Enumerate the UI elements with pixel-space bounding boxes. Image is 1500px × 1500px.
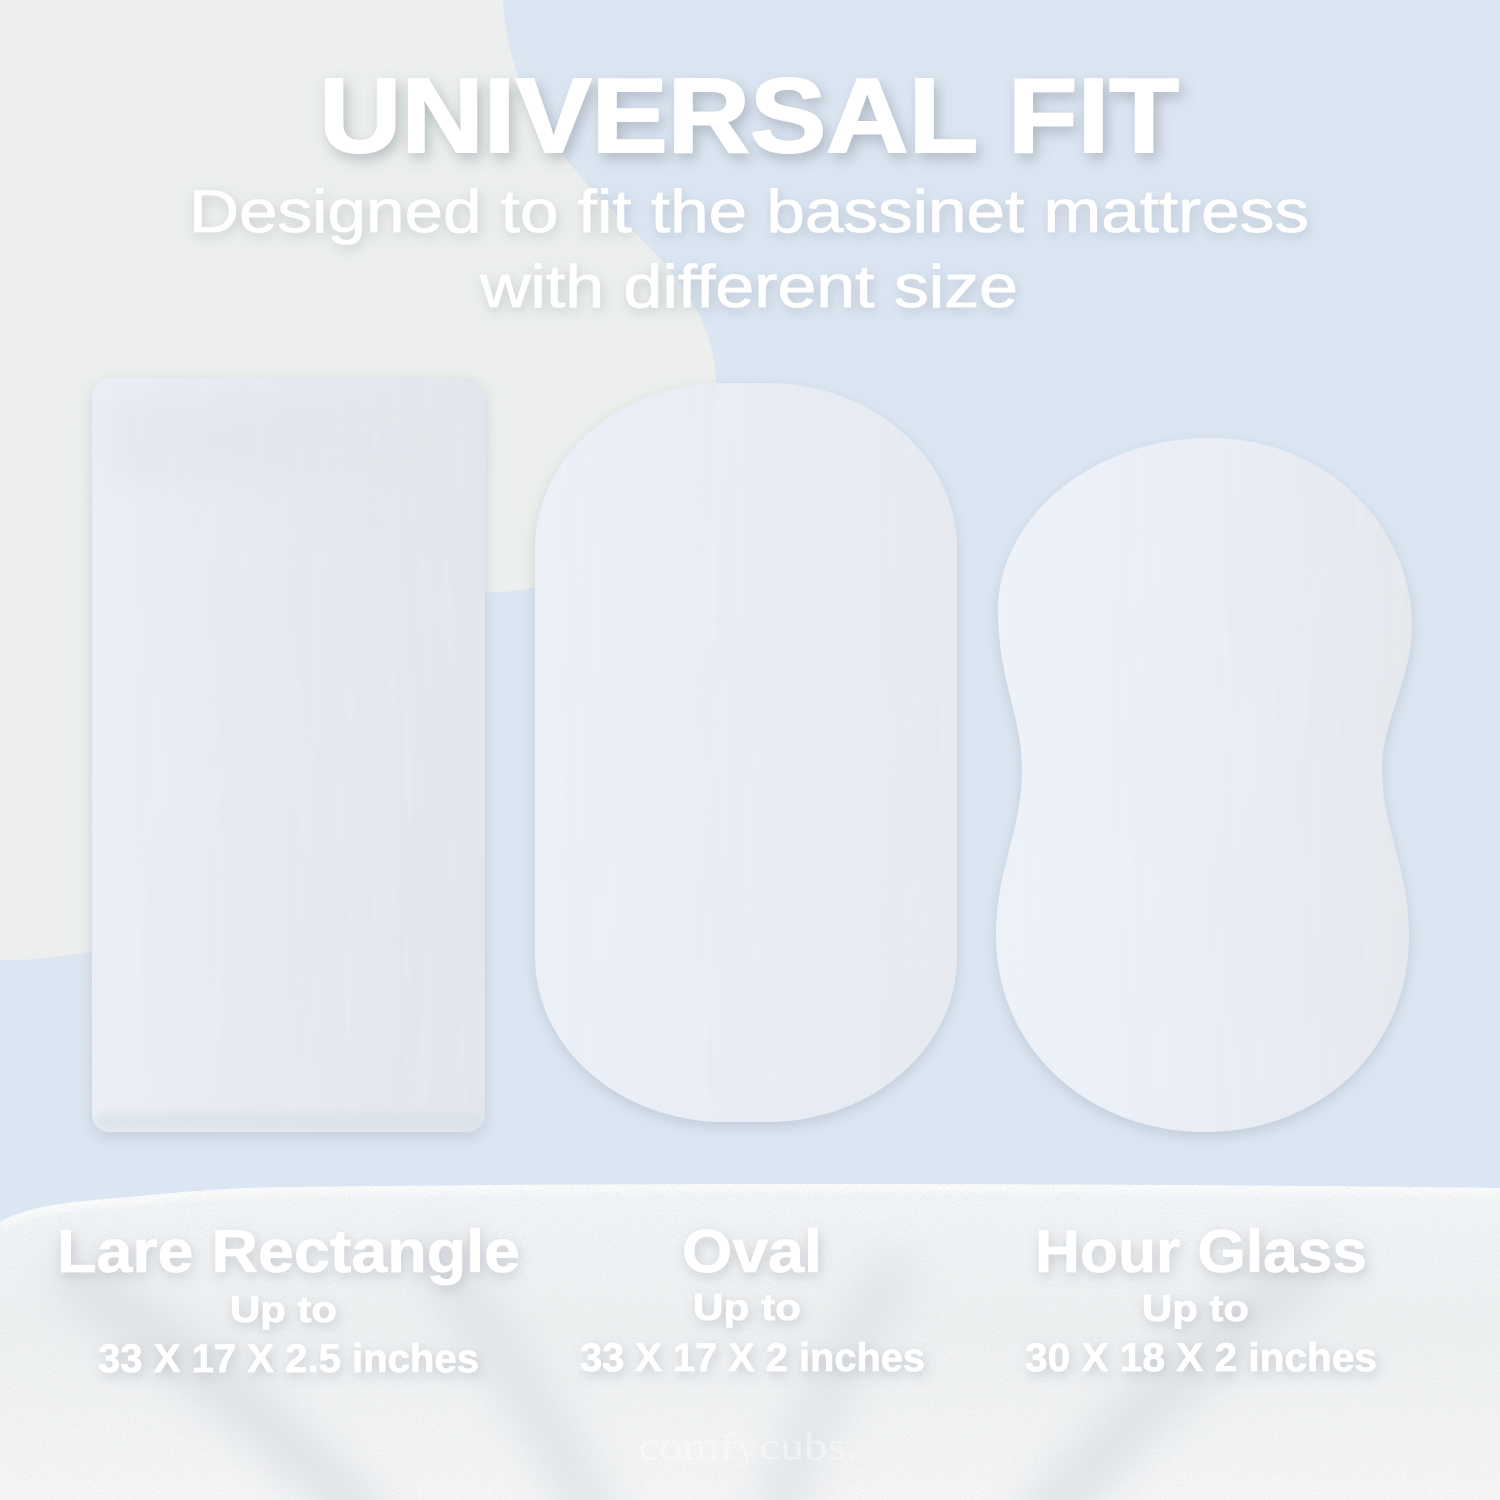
label: large rectangle: Lare Rectangle — [57, 1218, 520, 1285]
fabric strip — [0, 1180, 1500, 1500]
label: oval: Up to — [693, 1287, 801, 1328]
label: hourglass: Up to — [1142, 1288, 1249, 1329]
label: large rectangle — [57, 1218, 520, 1381]
brand logo: comfycubs. — [638, 1426, 858, 1468]
label: large rectangle: 33 X 17 X 2.5 inches — [98, 1337, 479, 1381]
label: oval — [580, 1218, 925, 1380]
label: large rectangle: Up to — [230, 1289, 337, 1330]
label: hourglass: 30 X 18 X 2 inches — [1025, 1336, 1377, 1380]
subtitle: with different size — [479, 253, 1018, 320]
label: hourglass: Hour Glass — [1035, 1218, 1367, 1285]
subtitle — [189, 178, 1309, 320]
label: oval: 33 X 17 X 2 inches — [580, 1336, 925, 1380]
background shape: grey blob — [0, 0, 716, 960]
mattress: large rectangle — [92, 378, 485, 1132]
mattress: hourglass — [996, 438, 1412, 1132]
title: UNIVERSAL FIT — [319, 57, 1179, 175]
mattress: oval — [535, 383, 957, 1122]
subtitle: Designed to fit the bassinet mattress — [189, 178, 1309, 245]
label: oval: Oval — [682, 1218, 822, 1285]
label: hourglass — [1025, 1218, 1377, 1380]
